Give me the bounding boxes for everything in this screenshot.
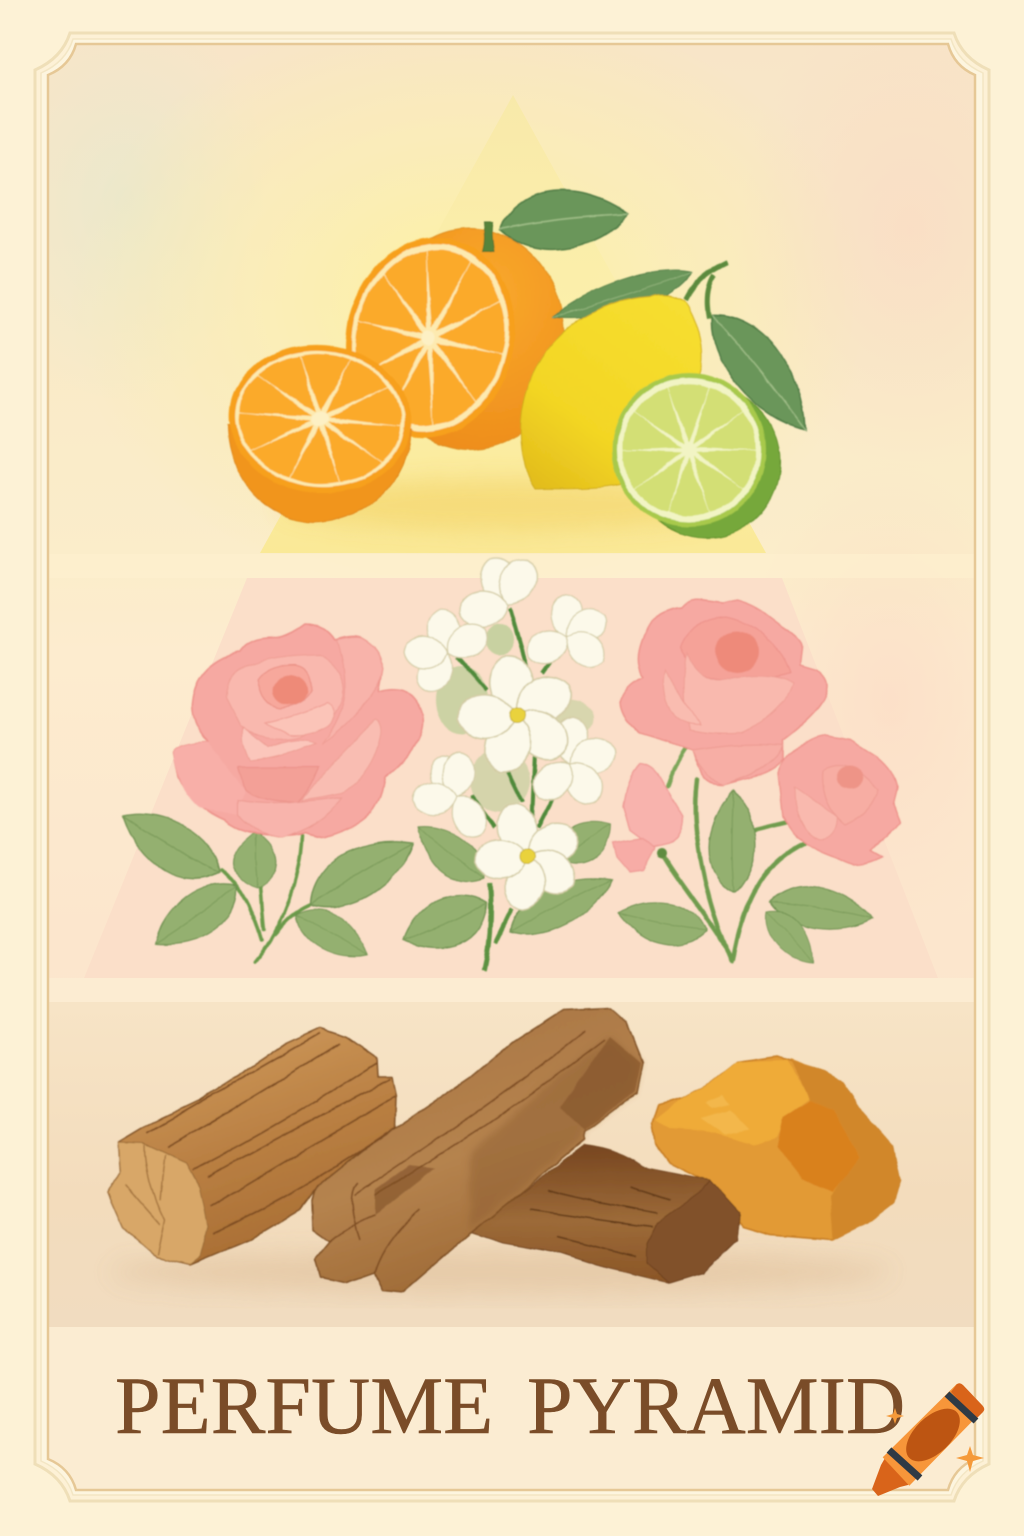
title: PERFUME xyxy=(115,1360,493,1451)
panel: middle tier trapezoid xyxy=(84,578,938,978)
shadow under citrus xyxy=(280,479,740,531)
icon: short dark log xyxy=(470,1145,740,1283)
icon: long log xyxy=(312,1008,643,1292)
heart notes: floral illustration xyxy=(110,552,900,972)
icon: cut lime xyxy=(612,373,780,538)
base notes: woods and amber illustration xyxy=(108,1008,900,1294)
icon: pink rose cluster right xyxy=(613,600,900,972)
title xyxy=(115,1360,905,1451)
icon: amber chunk xyxy=(652,1056,900,1240)
icon: pink rose left xyxy=(110,624,425,969)
icon: jasmine sprig xyxy=(394,552,621,970)
small rose xyxy=(778,735,900,865)
top notes: citrus illustration xyxy=(223,183,828,538)
icon: left log xyxy=(108,1028,396,1265)
icon: whole orange with leaf xyxy=(325,183,632,455)
panel: base tier band xyxy=(48,1002,975,1327)
icon: crayon logo with sparkles xyxy=(872,1383,984,1496)
title: PYRAMID xyxy=(527,1360,905,1451)
ground shadow xyxy=(110,1250,890,1294)
panel: top tier triangle xyxy=(260,95,766,553)
icon: lemon with leaves xyxy=(520,258,828,489)
icon: cut orange half xyxy=(223,337,417,522)
panel: title band xyxy=(48,1327,975,1490)
panel: divider band bottom xyxy=(48,978,975,1002)
panel: background wash xyxy=(49,45,974,978)
panel: divider band top xyxy=(48,554,975,578)
bud xyxy=(623,763,683,847)
